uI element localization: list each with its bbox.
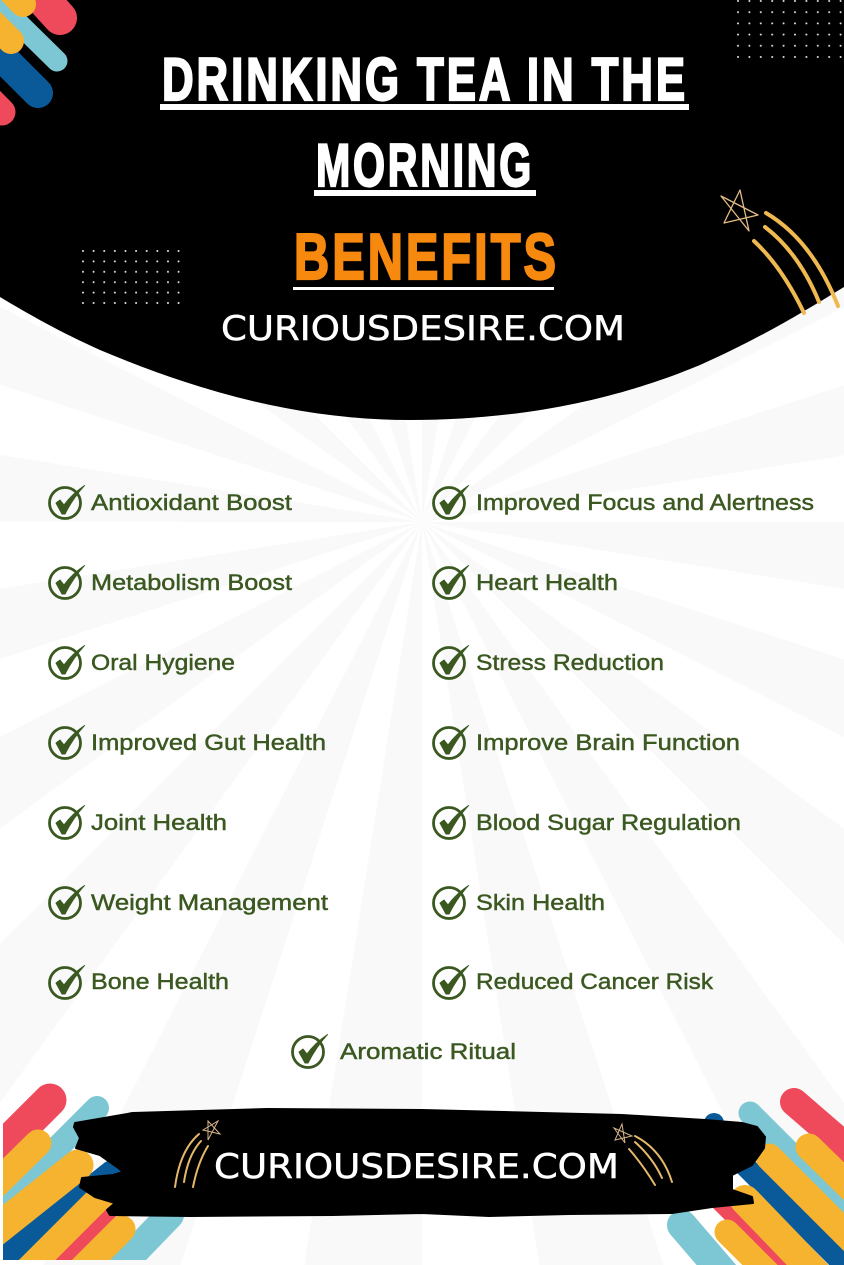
item: Heart Health (434, 566, 618, 598)
decoration: dot grid top right (737, 0, 844, 58)
item: Skin Health (434, 886, 605, 918)
icon: shooting star left (175, 1121, 220, 1187)
item: Metabolism Boost: Metabolism Boost (91, 570, 292, 595)
subtitle: benefits: BENEFITS (294, 220, 559, 293)
benefits list: right column (434, 486, 814, 998)
decoration: dot grid left (82, 250, 180, 304)
item: Improved Gut Health (50, 726, 326, 758)
item: Reduced Cancer Risk: Reduced Cancer Risk (476, 969, 714, 994)
panel: bottom brush banner (74, 1109, 765, 1216)
panel: black header (0, 0, 844, 420)
item: Oral Hygiene (50, 646, 235, 678)
item: Bone Health (50, 966, 229, 998)
website text: CURIOUSDESIRE.COM (221, 309, 625, 349)
item: Stress Reduction (434, 646, 664, 678)
icon: shooting star (721, 190, 838, 313)
item: Joint Health: Joint Health (91, 810, 227, 835)
subtitle underline (293, 287, 554, 290)
item: Weight Management: Weight Management (91, 890, 328, 915)
title underline 1 (160, 104, 689, 110)
item: Improved Gut Health: Improved Gut Health (91, 730, 326, 755)
item: Antioxidant Boost (50, 486, 292, 518)
item: Aromatic Ritual: Aromatic Ritual (340, 1039, 516, 1064)
background sunburst (0, 22, 844, 1022)
item: Reduced Cancer Risk (434, 966, 714, 998)
item: Improve Brain Function: Improve Brain Function (476, 730, 740, 755)
item: Blood Sugar Regulation (434, 806, 741, 838)
item: Metabolism Boost (50, 566, 292, 598)
benefits list: left column (50, 486, 328, 998)
decoration: bottom-left stripes (0, 1100, 170, 1265)
item: Oral Hygiene: Oral Hygiene (91, 650, 235, 675)
item: Heart Health: Heart Health (476, 570, 618, 595)
item: Stress Reduction: Stress Reduction (476, 650, 664, 675)
item: Improved Focus and Alertness: Improved Focus and Alertness (476, 490, 814, 515)
title underline 2 (314, 190, 536, 196)
item: Weight Management (50, 886, 328, 918)
item: Joint Health (50, 806, 227, 838)
item: Bone Health: Bone Health (91, 969, 229, 994)
icon: shooting star right (614, 1124, 672, 1185)
item: Improved Focus and Alertness (434, 486, 814, 518)
website text: CURIOUSDESIRE.COM (214, 1147, 619, 1187)
decoration: bottom-right stripes (682, 1102, 844, 1265)
title line 2: MORNING (316, 132, 534, 199)
item: Blood Sugar Regulation: Blood Sugar Regulation (476, 810, 741, 835)
item: Skin Health: Skin Health (476, 890, 605, 915)
item: Antioxidant Boost: Antioxidant Boost (91, 490, 292, 515)
decoration: top-left stripes (0, 0, 60, 112)
item: Improve Brain Function (434, 726, 740, 758)
item: Aromatic Ritual (292, 1034, 516, 1068)
